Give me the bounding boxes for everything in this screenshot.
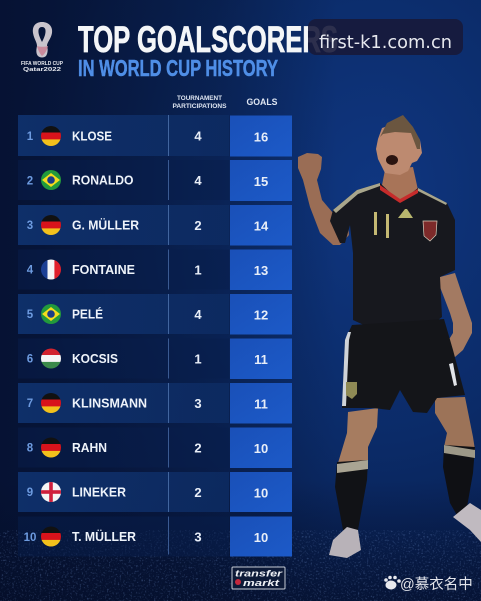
logo: transfermarkt: markt — [243, 578, 280, 589]
row 3: G. Müller — [18, 205, 292, 246]
row 6: Kocsis: 6 — [27, 354, 33, 366]
right sock stripes — [444, 445, 475, 458]
row 2: Ronaldo — [18, 160, 292, 201]
row 7: Klinsmann: 3 — [194, 396, 202, 411]
logo: transfermarkt: transfer — [235, 568, 284, 580]
icon: trophy emblem — [33, 22, 52, 58]
raised arm and fist — [298, 153, 349, 245]
row 10: T. Müller: 3 — [194, 530, 202, 544]
logo: FIFA World Cup Qatar 2022 — [21, 22, 64, 73]
row 1: Klose: 16 — [254, 130, 268, 144]
column header: tournament participations — [172, 95, 226, 110]
row 5: Pelé: PELÉ — [72, 306, 103, 322]
row 5: Pelé — [18, 294, 292, 334]
watermark: author handle: @慕衣名中 — [400, 576, 473, 593]
row 2: Ronaldo: RONALDO — [72, 172, 134, 188]
row 10: T. Müller: T. MÜLLER — [72, 529, 137, 544]
row 8: Rahn: 10 — [254, 441, 268, 456]
row 10: T. Müller — [18, 516, 292, 556]
row 6: Kocsis: 1 — [194, 352, 202, 366]
row 9: Lineker: 10 — [254, 486, 268, 500]
row 5: Pelé: 12 — [254, 308, 268, 322]
row 6: Kocsis: 11 — [254, 352, 268, 367]
column header: tournament participations: PARTICIPATIONS — [172, 103, 226, 110]
left sock — [335, 460, 368, 530]
crest — [423, 221, 437, 241]
lowered arm and hand — [440, 273, 472, 357]
row 5: Pelé: 4 — [194, 307, 202, 322]
icon: paw — [384, 576, 401, 590]
mouth — [386, 155, 398, 165]
row 4: Fontaine — [18, 250, 292, 290]
head — [376, 124, 422, 175]
row 2: Ronaldo: 2 — [27, 176, 33, 188]
shorts — [342, 319, 465, 413]
row 1: Klose: 1 — [27, 131, 34, 143]
row 9: Lineker: 9 — [27, 487, 33, 499]
shorts crest — [346, 382, 357, 399]
row 4: Fontaine: FONTAINE — [72, 262, 135, 277]
shorts number — [449, 363, 457, 386]
row 3: G. Müller: 14 — [254, 218, 269, 234]
row 1: Klose: KLOSE — [72, 128, 112, 144]
row 9: Lineker — [18, 472, 292, 512]
row 10: T. Müller: 10 — [24, 532, 36, 544]
row 6: Kocsis — [18, 338, 292, 379]
right sock — [443, 445, 475, 517]
row 4: Fontaine: 13 — [254, 263, 268, 278]
column header: goals: GOALS — [246, 97, 278, 107]
row 3: G. Müller: 2 — [194, 218, 202, 233]
watermark: site url: first-k1.com.cn — [319, 32, 452, 53]
row 8: Rahn — [18, 428, 292, 468]
row 1: Klose: 4 — [194, 128, 202, 144]
adidas logo — [398, 209, 413, 218]
watermark: site url — [308, 19, 463, 55]
logo: transfermarkt — [232, 567, 285, 589]
row 8: Rahn: 8 — [27, 442, 34, 454]
row 9: Lineker: LINEKER — [72, 484, 127, 500]
neck — [382, 167, 418, 202]
hair — [380, 115, 420, 149]
logo: FIFA World Cup Qatar 2022: FIFA WORLD CUP — [21, 61, 64, 67]
right leg — [435, 397, 475, 450]
player figure: Klose celebrating — [298, 115, 481, 558]
left sock stripes — [337, 460, 368, 473]
logo: FIFA World Cup Qatar 2022: Qatar2022 — [23, 67, 61, 73]
jersey — [330, 183, 455, 329]
jersey collar — [380, 185, 418, 203]
row 10: T. Müller: 10 — [254, 530, 268, 545]
left leg — [338, 408, 378, 463]
row 9: Lineker: 2 — [194, 485, 202, 500]
row 7: Klinsmann: 7 — [27, 398, 33, 410]
jersey shoulder stripes — [333, 183, 447, 213]
table: goalscorers ranking — [18, 115, 292, 556]
title: TOP GOALSCORERS — [78, 19, 338, 60]
row 7: Klinsmann: 11 — [254, 396, 268, 412]
row 2: Ronaldo: 15 — [254, 174, 268, 189]
row 1: Klose — [18, 115, 292, 156]
subtitle: IN WORLD CUP HISTORY — [78, 55, 278, 81]
row 7: Klinsmann — [18, 383, 292, 424]
row 3: G. Müller: 3 — [27, 220, 33, 232]
row 4: Fontaine: 1 — [194, 262, 202, 278]
row 8: Rahn: 2 — [194, 440, 202, 456]
left shoe — [329, 527, 361, 558]
row 8: Rahn: RAHN — [72, 440, 107, 455]
row 6: Kocsis: KOCSIS — [72, 351, 118, 366]
column header: tournament participations: TOURNAMENT — [177, 95, 222, 102]
row 5: Pelé: 5 — [27, 309, 34, 321]
row 2: Ronaldo: 4 — [194, 173, 202, 188]
right shoe — [453, 503, 481, 542]
row 4: Fontaine: 4 — [27, 264, 34, 276]
shorts stripes — [342, 332, 351, 406]
row 7: Klinsmann: KLINSMANN — [72, 396, 147, 410]
jersey number — [374, 212, 389, 238]
row 3: G. Müller: G. MÜLLER — [72, 218, 140, 232]
